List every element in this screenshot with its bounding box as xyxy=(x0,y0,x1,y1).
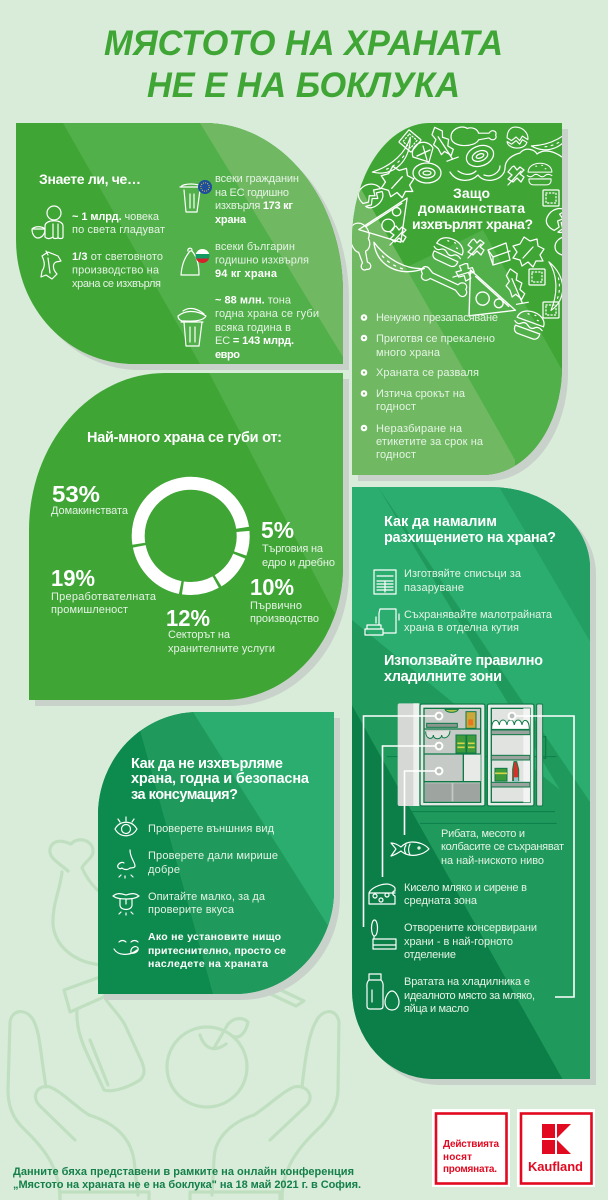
icon: smile xyxy=(114,940,138,954)
text: taste a little: Опитайте малко, за да xyxy=(148,891,266,903)
stat: 10 percent: производство xyxy=(250,613,319,625)
donut chart xyxy=(138,483,243,588)
text: 88 million tonnes: ЕС = 143 млрд. xyxy=(215,335,294,347)
text: one third wasted: производство на xyxy=(72,264,160,276)
text: check appearance: Проверете външния вид xyxy=(148,823,275,835)
text: one billion hungry: по света гладуват xyxy=(72,224,165,236)
left hand xyxy=(8,1012,138,1200)
list: reasons: Храната се разваля xyxy=(376,367,479,379)
logo: slogan xyxy=(432,1109,510,1187)
list: reasons: етикетите за срок на xyxy=(376,436,484,448)
background illustration: hands holding food xyxy=(8,840,339,1200)
text: separate box: Съхранявайте малотрайната xyxy=(404,609,553,621)
text: separate box xyxy=(404,609,553,634)
list: reasons: годност xyxy=(376,401,416,413)
text: check smell: добре xyxy=(148,864,180,876)
icon: shopping list xyxy=(374,570,396,594)
title: НЕ Е НА БОКЛУКА xyxy=(147,66,460,105)
heading: how to reduce waste xyxy=(384,514,556,546)
text: one third wasted: храна се изхвърля xyxy=(72,278,161,290)
text: 88 million tonnes: годна храна се губи xyxy=(215,308,319,320)
text: one third wasted xyxy=(72,251,163,290)
stat: 10 percent: 10% xyxy=(250,574,294,600)
text: Bulgarian citizen xyxy=(215,241,309,280)
icon: open can xyxy=(372,920,396,949)
icon: tongue xyxy=(113,894,139,915)
heading: how not to throw away: Как да не изхвърляме xyxy=(131,756,283,772)
stat: 5 percent xyxy=(261,517,335,569)
logo: Kaufland xyxy=(517,1109,595,1187)
icon: cheese xyxy=(369,884,395,904)
text: yogurt and cheese: Кисело мляко и сирене в xyxy=(404,882,527,894)
text: fridge door: яйца и масло xyxy=(404,1003,469,1015)
icon: bottle and egg xyxy=(367,974,399,1010)
heading: why households: домакинствата xyxy=(418,200,525,216)
text: Bulgarian citizen: 94 кг храна xyxy=(215,268,278,280)
stat: 53 percent: Домакинствата xyxy=(51,505,129,517)
bottle xyxy=(64,977,144,1091)
text: taste a little xyxy=(148,891,266,916)
heading: how not to throw away xyxy=(131,756,310,803)
icon: bag with Bulgarian flag xyxy=(181,248,210,275)
text: opened cans: Отворените консервирани xyxy=(404,922,537,934)
heading: why households xyxy=(412,185,533,232)
text: one billion hungry xyxy=(72,211,165,236)
stat: 10 percent xyxy=(250,574,319,625)
heading: most food lost: Най-много храна се губи от: xyxy=(87,430,282,446)
text: fridge door xyxy=(404,976,535,1015)
title xyxy=(104,24,503,105)
text: EU citizen: всеки гражданин xyxy=(215,173,299,185)
heading: why households: изхвърлят храна? xyxy=(412,216,533,232)
heading: how to reduce waste: Как да намалим xyxy=(384,514,497,530)
text: Bulgarian citizen: всеки българин xyxy=(215,241,295,253)
text: EU citizen: на ЕС годишно xyxy=(215,187,289,199)
panel: why households throw food away xyxy=(352,123,568,481)
stat: 19 percent: 19% xyxy=(51,565,95,591)
logo: slogan: Действията xyxy=(443,1139,499,1150)
text: EU citizen: храна xyxy=(215,214,247,226)
heading: how to reduce waste: разхищението на храна? xyxy=(384,530,556,546)
stat: 12 percent: хранителните услуги xyxy=(168,643,275,655)
icon: fish xyxy=(391,842,429,856)
list: reasons: годност xyxy=(376,449,416,461)
text: 88 million tonnes xyxy=(215,294,319,361)
text: 88 million tonnes: ~ 88 млн. тона xyxy=(215,294,292,306)
stat: 12 percent: Секторът на xyxy=(168,629,231,641)
heading: why households: Защо xyxy=(453,185,490,201)
logo: slogan: носят xyxy=(443,1152,472,1163)
list: reasons: Неразбиране на xyxy=(376,423,463,435)
icon: apple core xyxy=(41,251,61,279)
text: fridge door: идеалното място за мляко, xyxy=(404,990,535,1002)
stat: 12 percent: 12% xyxy=(166,605,210,631)
heading: use fridge zones: хладилните зони xyxy=(384,669,502,685)
footer note: „Мястото на храната не е на боклука" на 18 май 2021 г. в София. xyxy=(13,1179,361,1191)
apple xyxy=(167,1027,247,1107)
text: 88 million tonnes: всяка година в xyxy=(215,322,291,334)
text: opened cans: отделение xyxy=(404,949,456,961)
text: shopping lists: Изготвяйте списъци за xyxy=(404,568,522,580)
stat: 12 percent xyxy=(166,605,275,655)
footer note: Данните бяха представени в рамките на онлайн конференция xyxy=(13,1166,354,1178)
connector lines xyxy=(364,713,574,997)
text: EU citizen xyxy=(215,173,299,226)
heading: how not to throw away: храна, годна и безопасна xyxy=(131,771,310,787)
text: enjoy the food: притеснително, просто се xyxy=(148,945,286,957)
icon: bin with food xyxy=(178,308,206,346)
stat: 19 percent xyxy=(51,565,157,616)
heading: use fridge zones xyxy=(384,653,543,685)
text: opened cans: храни - в най-горното xyxy=(404,936,513,948)
text: enjoy the food xyxy=(148,931,286,970)
footer note xyxy=(13,1166,361,1191)
text: fish and meat: Рибата, месото и xyxy=(441,828,525,840)
icon: hungry person xyxy=(32,206,63,238)
panel: where most food is lost xyxy=(20,365,350,706)
list: reasons: много храна xyxy=(376,347,441,359)
text: one billion hungry: ~ 1 млрд. човека xyxy=(72,211,160,223)
text: check smell xyxy=(148,850,278,876)
text: yogurt and cheese: средната зона xyxy=(404,895,478,907)
stat: 19 percent: Преработвателната xyxy=(51,591,157,603)
text: check smell: Проверете дали мирише xyxy=(148,850,278,862)
text: fish and meat xyxy=(441,828,564,867)
logo: Kaufland: Kaufland xyxy=(528,1159,583,1174)
icon: eye xyxy=(115,817,137,836)
text: shopping lists xyxy=(404,568,522,594)
illustration: open fridge xyxy=(387,703,557,823)
chicken leg outline xyxy=(50,840,120,965)
text: fish and meat: колбасите се съхраняват xyxy=(441,841,564,853)
food doodles xyxy=(352,126,562,340)
icon: bin with EU flag xyxy=(180,180,212,212)
text: EU citizen: изхвърля 173 кг xyxy=(215,200,293,212)
list: reasons: Ненужно презапасяване xyxy=(376,312,498,324)
text: fridge door: Вратата на хладилника е xyxy=(404,976,530,988)
list: reasons xyxy=(362,312,498,461)
text: taste a little: проверите вкуса xyxy=(148,904,235,916)
heading: how not to throw away: за консумация? xyxy=(131,787,238,803)
icon: storage box xyxy=(365,609,399,635)
stat: 19 percent: промишленост xyxy=(51,604,128,616)
logo: slogan: промяната. xyxy=(443,1164,497,1175)
panel: how to reduce waste xyxy=(340,480,596,1090)
stat: 53 percent xyxy=(51,481,129,517)
stat: 5 percent: Търговия на xyxy=(262,543,324,555)
list: reasons: Приготвя се прекалено xyxy=(376,333,495,345)
text: fish and meat: на най-ниското ниво xyxy=(441,855,544,867)
text: opened cans xyxy=(404,922,537,961)
text: separate box: храна в отделна кутия xyxy=(404,622,519,634)
text: shopping lists: пазаруване xyxy=(404,582,464,594)
title: МЯСТОТО НА ХРАНАТА xyxy=(104,24,503,63)
text: 88 million tonnes: евро xyxy=(215,349,240,361)
heading: did you know: Знаете ли, че… xyxy=(39,171,141,187)
stat: 5 percent: едро и дребно xyxy=(262,557,335,569)
right hand xyxy=(212,1012,339,1200)
box behind panel xyxy=(262,984,304,1006)
stat: 53 percent: 53% xyxy=(52,481,100,507)
heading: use fridge zones: Използвайте правилно xyxy=(384,653,543,669)
list: reasons: Изтича срокът на xyxy=(376,388,466,400)
stat: 10 percent: Първично xyxy=(250,600,302,612)
text: one third wasted: 1/3 от световното xyxy=(72,251,163,263)
panel: did you know xyxy=(16,123,349,370)
text: Bulgarian citizen: годишно изхвърля xyxy=(215,254,309,266)
text: enjoy the food: наследете на храната xyxy=(148,958,268,970)
sleeves xyxy=(60,1192,280,1200)
text: enjoy the food: Ако не установите нищо xyxy=(148,931,281,943)
stat: 5 percent: 5% xyxy=(261,517,294,543)
text: yogurt and cheese xyxy=(404,882,527,907)
icon: nose xyxy=(118,850,135,878)
panel: how not to throw away food xyxy=(90,705,340,1000)
